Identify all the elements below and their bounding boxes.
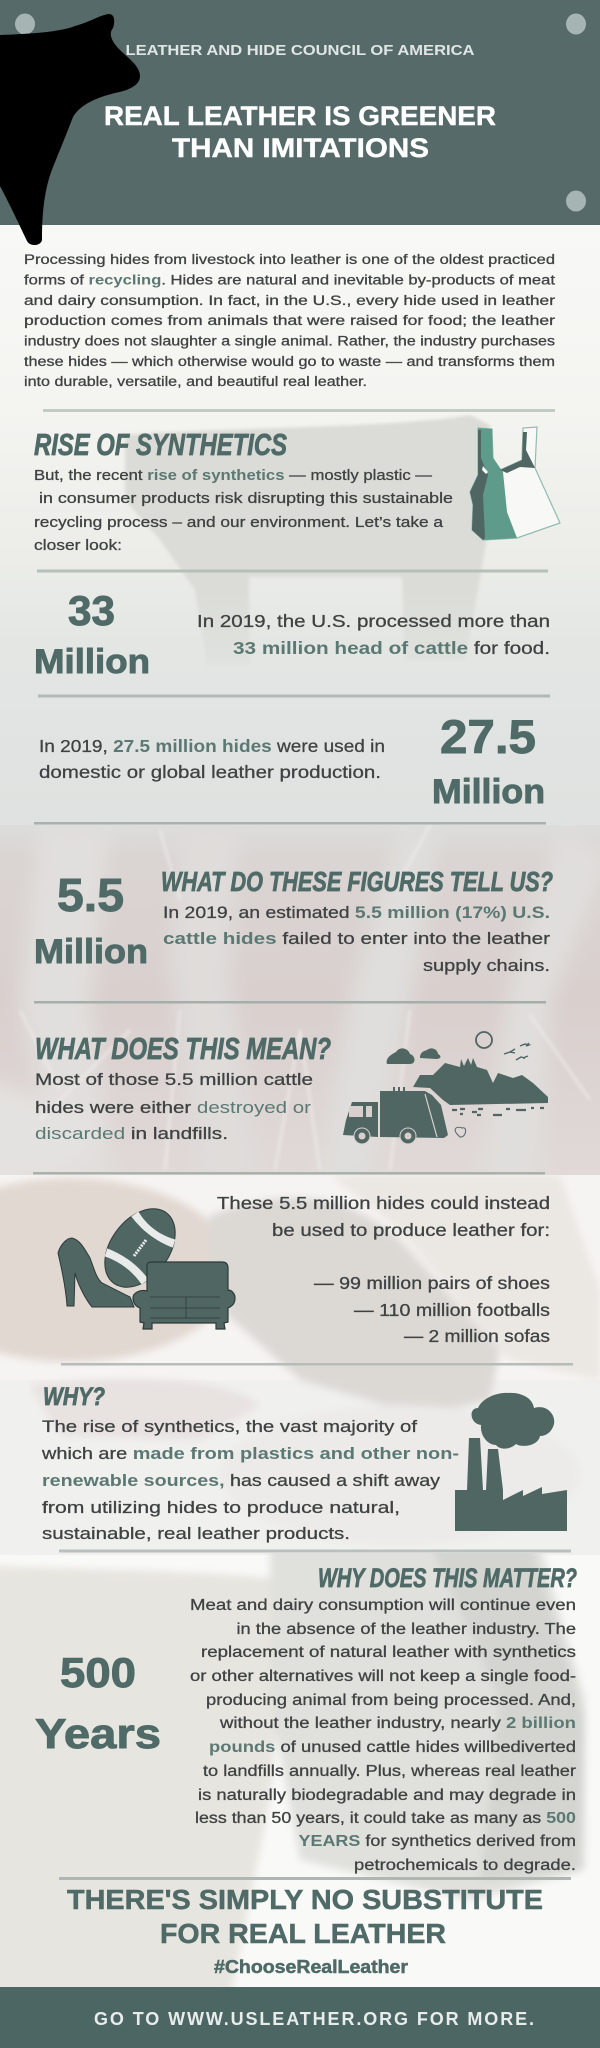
body text: in the absence of the leather industry. The [236, 1621, 576, 1638]
text block: introduction: Processing hides from livestock into leather is one of the oldest practiced [24, 252, 555, 267]
text: — 2 million sofas [404, 1326, 550, 1346]
panel: why does this matter [35, 1563, 577, 1874]
header dots [15, 14, 586, 212]
text [217, 1193, 550, 1346]
body text: YEARS for synthetics derived from [298, 1833, 576, 1850]
text: — 110 million footballs [354, 1300, 550, 1320]
body text [163, 903, 550, 975]
body text: closer look: [34, 537, 122, 554]
icon: garbage truck and landfill [343, 1032, 548, 1144]
background: football and shoe photo [0, 1176, 600, 1439]
background: ghost cow photo [124, 414, 490, 644]
icon: plastic bag [470, 427, 560, 540]
text block: introduction: forms of recycling . Hides are natural and inevitable by-products of meat [24, 272, 555, 288]
panel: why [41, 1383, 567, 1543]
text: 33 million head of cattle for food. [233, 638, 550, 658]
body text [34, 467, 453, 554]
title: THAN IMITATIONS [172, 133, 429, 163]
background: leather sofa streaks [0, 825, 600, 1180]
big number: 500 [60, 1649, 136, 1696]
body text: recycling process – and our environment. Let’s take a [34, 514, 444, 531]
body text: producing animal from being processed. And, [206, 1692, 576, 1709]
body text [41, 1417, 459, 1543]
panel: what do these figures tell us: 5.5 [57, 869, 124, 921]
body text: The rise of synthetics, the vast majority of [42, 1417, 417, 1436]
text block: introduction: these hides — which otherwise would go to waste — and transforms them [24, 354, 555, 369]
panel: what do these figures tell us [34, 866, 553, 975]
body text: But, the recent rise of synthetics — mostly plastic — [34, 467, 432, 484]
body text: pounds of unused cattle hides willbediverted [209, 1739, 576, 1756]
stat: 33 million [34, 587, 550, 681]
body text: is naturally biodegradable and may degrade in [198, 1787, 576, 1804]
heading: WHY? [43, 1383, 105, 1411]
text block: introduction: into durable, versatile, and beautiful real leather. [24, 374, 367, 389]
stat: 33 million: Million [34, 643, 150, 681]
text: be used to produce leather for: [272, 1220, 550, 1240]
header band [0, 0, 600, 225]
body text [35, 1070, 313, 1143]
text: — 99 million pairs of shoes [314, 1273, 550, 1293]
background: bottom ghost cow photo [0, 1545, 585, 2000]
body text: supply chains. [423, 956, 550, 975]
title: REAL LEATHER IS GREENER [104, 101, 496, 131]
body text: to landfills annually. Plus, whereas real leather [203, 1763, 576, 1780]
body text: In 2019, an estimated 5.5 million (17%) U.S. [163, 903, 550, 922]
panel: what does this mean [35, 1031, 548, 1144]
body text: without the leather industry, nearly 2 billion [219, 1715, 576, 1732]
stat: 27.5 million: 27.5 [440, 710, 536, 763]
closing statement: THERE'S SIMPLY NO SUBSTITUTE [67, 1884, 543, 1915]
icon: black cow silhouette [0, 14, 140, 245]
title [104, 101, 496, 163]
body text: less than 50 years, it could take as many as 500 [195, 1810, 576, 1827]
text block: introduction: and dairy consumption. In fact, in the U.S., every hide used in leather [24, 293, 556, 308]
body text: from utilizing hides to produce natural, [42, 1498, 400, 1517]
panel: what hides could produce [58, 1193, 550, 1346]
body text: renewable sources, has caused a shift away [42, 1471, 441, 1490]
footer band [0, 1987, 600, 2048]
organisation name: LEATHER AND HIDE COUNCIL OF AMERICA [126, 43, 475, 59]
body text: sustainable, real leather products. [42, 1524, 350, 1543]
stat: 27.5 million: In 2019, 27.5 million hides were used in [39, 736, 385, 756]
body text: which are made from plastics and other non- [41, 1444, 459, 1463]
text [197, 611, 550, 658]
body text: discarded in landfills. [35, 1124, 228, 1143]
heading: WHAT DOES THIS MEAN? [35, 1031, 331, 1066]
icon: shoe, football and sofa [58, 1195, 235, 1329]
panel: what do these figures tell us: Million [34, 933, 148, 971]
hashtag: #ChooseRealLeather [214, 1957, 408, 1977]
body text: replacement of natural leather with synthetics [201, 1644, 576, 1661]
stat: 33 million: 33 [68, 587, 115, 634]
body text: hides were either destroyed or [35, 1098, 311, 1117]
body text [190, 1597, 576, 1874]
stat: 27.5 million: Million [432, 773, 545, 811]
text: These 5.5 million hides could instead [217, 1193, 550, 1213]
body text: or other alternatives will not keep a single food- [190, 1668, 576, 1685]
closing statement [67, 1884, 543, 1977]
body text: cattle hides failed to enter into the leather [163, 929, 550, 948]
footer text: GO TO WWW.USLEATHER.ORG FOR MORE. [94, 2009, 534, 2029]
stat: 27.5 million: domestic or global leather production. [39, 762, 381, 782]
stat: 27.5 million [39, 710, 545, 811]
body text: petrochemicals to degrade. [354, 1857, 576, 1874]
heading: RISE OF SYNTHETICS [34, 427, 287, 462]
body text: Most of those 5.5 million cattle [35, 1070, 313, 1089]
text block: introduction: production comes from animals that were raised for food; the leather [24, 313, 556, 328]
panel: rise of synthetics [34, 427, 560, 554]
body text: Meat and dairy consumption will continue even [190, 1597, 576, 1614]
panel: why does this matter: Years [35, 1710, 161, 1757]
closing statement: FOR REAL LEATHER [160, 1918, 446, 1949]
text: In 2019, the U.S. processed more than [197, 611, 550, 631]
body text: in consumer products risk disrupting this sustainable [39, 490, 453, 507]
icon: factory with smoke [455, 1393, 567, 1531]
text block: introduction: industry does not slaughter a single animal. Rather, the industry purchases [24, 334, 555, 348]
text block: introduction [24, 252, 556, 389]
